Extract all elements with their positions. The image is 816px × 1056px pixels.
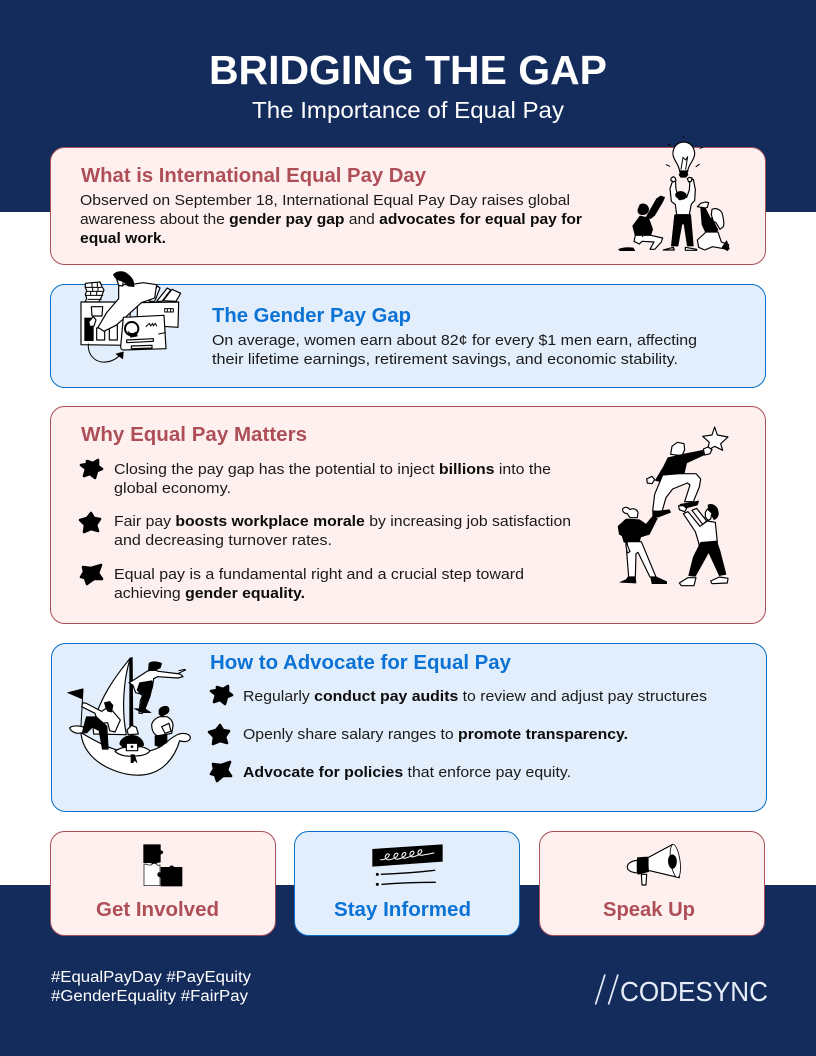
panel: what is international equal pay day: [50, 137, 766, 264]
text block: definition: [80, 192, 582, 247]
bullet: policies: Advocate for policies that enforce pay equity.: [243, 764, 571, 781]
bullet: economy: global economy.: [114, 480, 231, 497]
panel: speak up: [540, 832, 764, 936]
bullet: fundamental right: achieving gender equality.: [114, 585, 305, 602]
title: BRIDGING THE GAP: [209, 47, 607, 93]
icon: people reaching for a light bulb: [619, 137, 729, 251]
bullet: fundamental right: Equal pay is a fundamental right and a crucial step toward: [114, 566, 524, 583]
bullet: transparency: Openly share salary ranges to promote transparency.: [243, 726, 628, 743]
text block: definition: Observed on September 18, International Equal Pay Day raises global: [80, 192, 570, 209]
bullet: economy: Closing the pay gap has the potential to inject billions into the: [114, 461, 551, 478]
panel: stay informed: [294, 832, 520, 936]
label: stay informed: Stay Informed: [334, 898, 471, 921]
text block: pay gap explanation: their lifetime earnings, retirement savings, and economic stability.: [212, 351, 678, 368]
panel: why equal pay matters: [50, 406, 766, 624]
bullet: pay audits: Regularly conduct pay audits to review and adjust pay structures: [243, 688, 707, 705]
text block: definition: awareness about the gender pay gap and advocates for equal pay for: [80, 211, 582, 228]
hashtags: [51, 969, 251, 1005]
icon: puzzle pieces: [143, 844, 182, 886]
subtitle: The Importance of Equal Pay: [252, 97, 565, 123]
hashtags: #GenderEquality #FairPay: [51, 988, 248, 1005]
bullet: morale: and decreasing turnover rates.: [114, 532, 332, 549]
icon: written note: [372, 844, 443, 886]
heading: how to advocate for equal pay: How to Advocate for Equal Pay: [210, 651, 512, 674]
heading: the gender pay gap: The Gender Pay Gap: [212, 304, 411, 327]
panel: get involved: [50, 832, 276, 936]
logo: codesync: CODESYNC: [620, 976, 768, 1007]
text block: definition: equal work.: [80, 230, 166, 247]
panel: how to advocate for equal pay: [52, 644, 766, 812]
panel: the gender pay gap: [50, 272, 766, 388]
heading: what is international equal pay day: What is International Equal Pay Day: [81, 164, 427, 187]
heading: why equal pay matters: Why Equal Pay Matters: [81, 423, 307, 446]
icon: woman with bar chart and wallet: [81, 272, 181, 362]
text block: pay gap explanation: On average, women earn about 82¢ for every $1 men earn, affecting: [212, 332, 697, 349]
bullet: morale: Fair pay boosts workplace morale by increasing job satisfaction: [114, 513, 571, 530]
icon: megaphone: [627, 844, 682, 885]
icon: team on a sailboat: [68, 657, 190, 775]
bullet: morale: [80, 513, 571, 549]
bullet: fundamental right: [81, 565, 524, 602]
icon: team lifting a woman toward a star: [618, 427, 728, 586]
label: get involved: Get Involved: [96, 898, 219, 921]
hashtags: #EqualPayDay #PayEquity: [51, 969, 251, 986]
bullet: economy: [81, 460, 551, 497]
text block: pay gap explanation: [212, 332, 697, 368]
label: speak up: Speak Up: [603, 898, 695, 921]
